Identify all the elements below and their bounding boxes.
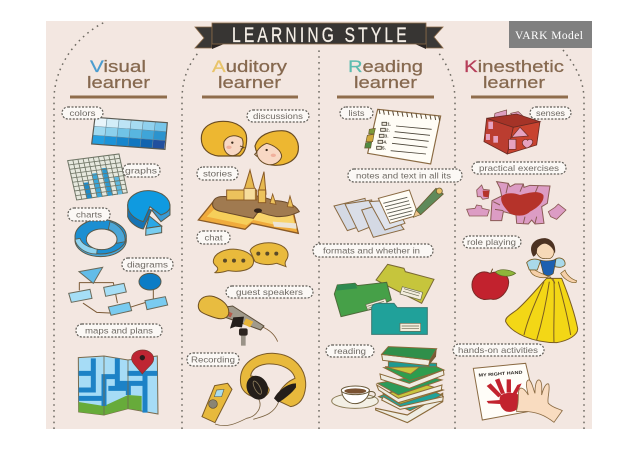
heading: Kinesthetic learner: learner — [483, 73, 545, 92]
icon: bar graph on grid — [68, 154, 128, 200]
badge: VARK Model — [509, 21, 592, 48]
label: colors — [62, 107, 103, 119]
label: graphs — [123, 164, 160, 177]
icon: princess figure — [506, 238, 578, 343]
label: formats and whether in: formats and whether in — [323, 246, 420, 256]
heading: Visual learner: learner — [87, 73, 150, 92]
label: senses: senses — [536, 108, 565, 118]
icon: red shape-sorter box — [484, 110, 540, 154]
title text: LEARNING STYLE — [232, 23, 407, 47]
heading: Auditory learner — [202, 57, 298, 98]
label: role playing — [463, 236, 521, 248]
heading: Auditory learner: Auditory — [212, 57, 288, 76]
heading: Auditory learner: learner — [218, 73, 281, 92]
heading: Kinesthetic learner: Kinesthetic — [464, 57, 565, 76]
label: graphs: graphs — [125, 166, 157, 176]
heading: Reading learner: learner — [354, 73, 417, 92]
label: lists: lists — [348, 108, 364, 118]
heading: Reading learner: Reading — [348, 57, 423, 76]
label: diagrams — [122, 258, 173, 271]
icon: red apple — [472, 269, 516, 299]
icon: checklist notepad — [365, 109, 441, 164]
icon: stack of books — [376, 347, 444, 423]
icon: two children talking — [201, 121, 298, 165]
label: formats and whether in — [313, 244, 433, 257]
icon: voice recorder — [202, 383, 232, 423]
label: chat: chat — [204, 232, 223, 242]
label: role playing: role playing — [467, 237, 516, 247]
label: reading — [326, 345, 374, 357]
icon: handprint on paper: MY RIGHT HAND — [478, 370, 523, 378]
label: maps and plans — [76, 324, 162, 337]
icon: folded map with pin — [78, 350, 158, 415]
label: chat — [197, 231, 230, 244]
label: maps and plans: maps and plans — [85, 326, 153, 336]
icon: checklist notepad: 5. — [382, 145, 386, 150]
label: charts: charts — [76, 210, 102, 220]
title banner — [195, 23, 443, 49]
heading: Kinesthetic learner — [464, 57, 568, 98]
panel: beige background — [46, 21, 592, 429]
icon: checklist notepad: 3. — [385, 133, 389, 138]
icon: checklist notepad: 2. — [386, 127, 390, 132]
icon: checklist notepad: 1. — [387, 122, 391, 127]
label: charts — [68, 208, 110, 221]
label: colors: colors — [70, 108, 96, 118]
icon: checklist notepad: 4. — [383, 139, 387, 144]
label: practical exercises: practical exercises — [479, 163, 559, 173]
heading: Visual learner: Visual — [90, 57, 146, 76]
icon: pop-up castle book — [198, 170, 299, 233]
icon: coffee cup and saucer — [332, 386, 378, 408]
label: discussions: discussions — [253, 111, 303, 121]
label: senses — [530, 107, 571, 119]
icon: donut chart — [75, 219, 126, 257]
icon: microphone — [198, 296, 278, 346]
label: hands-on activities — [453, 344, 544, 356]
icon: handprint on paper — [473, 363, 562, 422]
label: stories — [197, 167, 238, 180]
heading: Visual learner — [70, 57, 167, 98]
label: Recording: Recording — [191, 354, 235, 364]
icon: speech bubbles — [213, 243, 288, 273]
icon: color swatch grid — [92, 117, 167, 149]
label: practical exercises — [472, 162, 566, 174]
label: notes and text in all its: notes and text in all its — [356, 170, 451, 180]
label: reading: reading — [334, 346, 366, 356]
icon: headphones — [215, 353, 306, 426]
icon: flow diagram — [69, 267, 168, 315]
label: diagrams: diagrams — [127, 260, 168, 270]
label: guest speakers: guest speakers — [236, 287, 303, 297]
badge: VARK Model: VARK Model — [515, 30, 583, 42]
icon: 3D pie chart — [128, 191, 170, 235]
icon: loose papers and pencil — [334, 188, 443, 237]
label: guest speakers — [226, 286, 313, 298]
icon: three file folders — [334, 264, 434, 334]
label: Recording — [187, 353, 239, 366]
label: lists — [340, 107, 373, 119]
label: stories: stories — [203, 168, 232, 178]
icon: jigsaw puzzle — [467, 182, 566, 224]
label: notes and text in all its — [348, 169, 462, 182]
label: hands-on activities: hands-on activities — [458, 345, 538, 355]
label: discussions — [247, 110, 309, 122]
heading: Reading learner — [337, 57, 434, 98]
